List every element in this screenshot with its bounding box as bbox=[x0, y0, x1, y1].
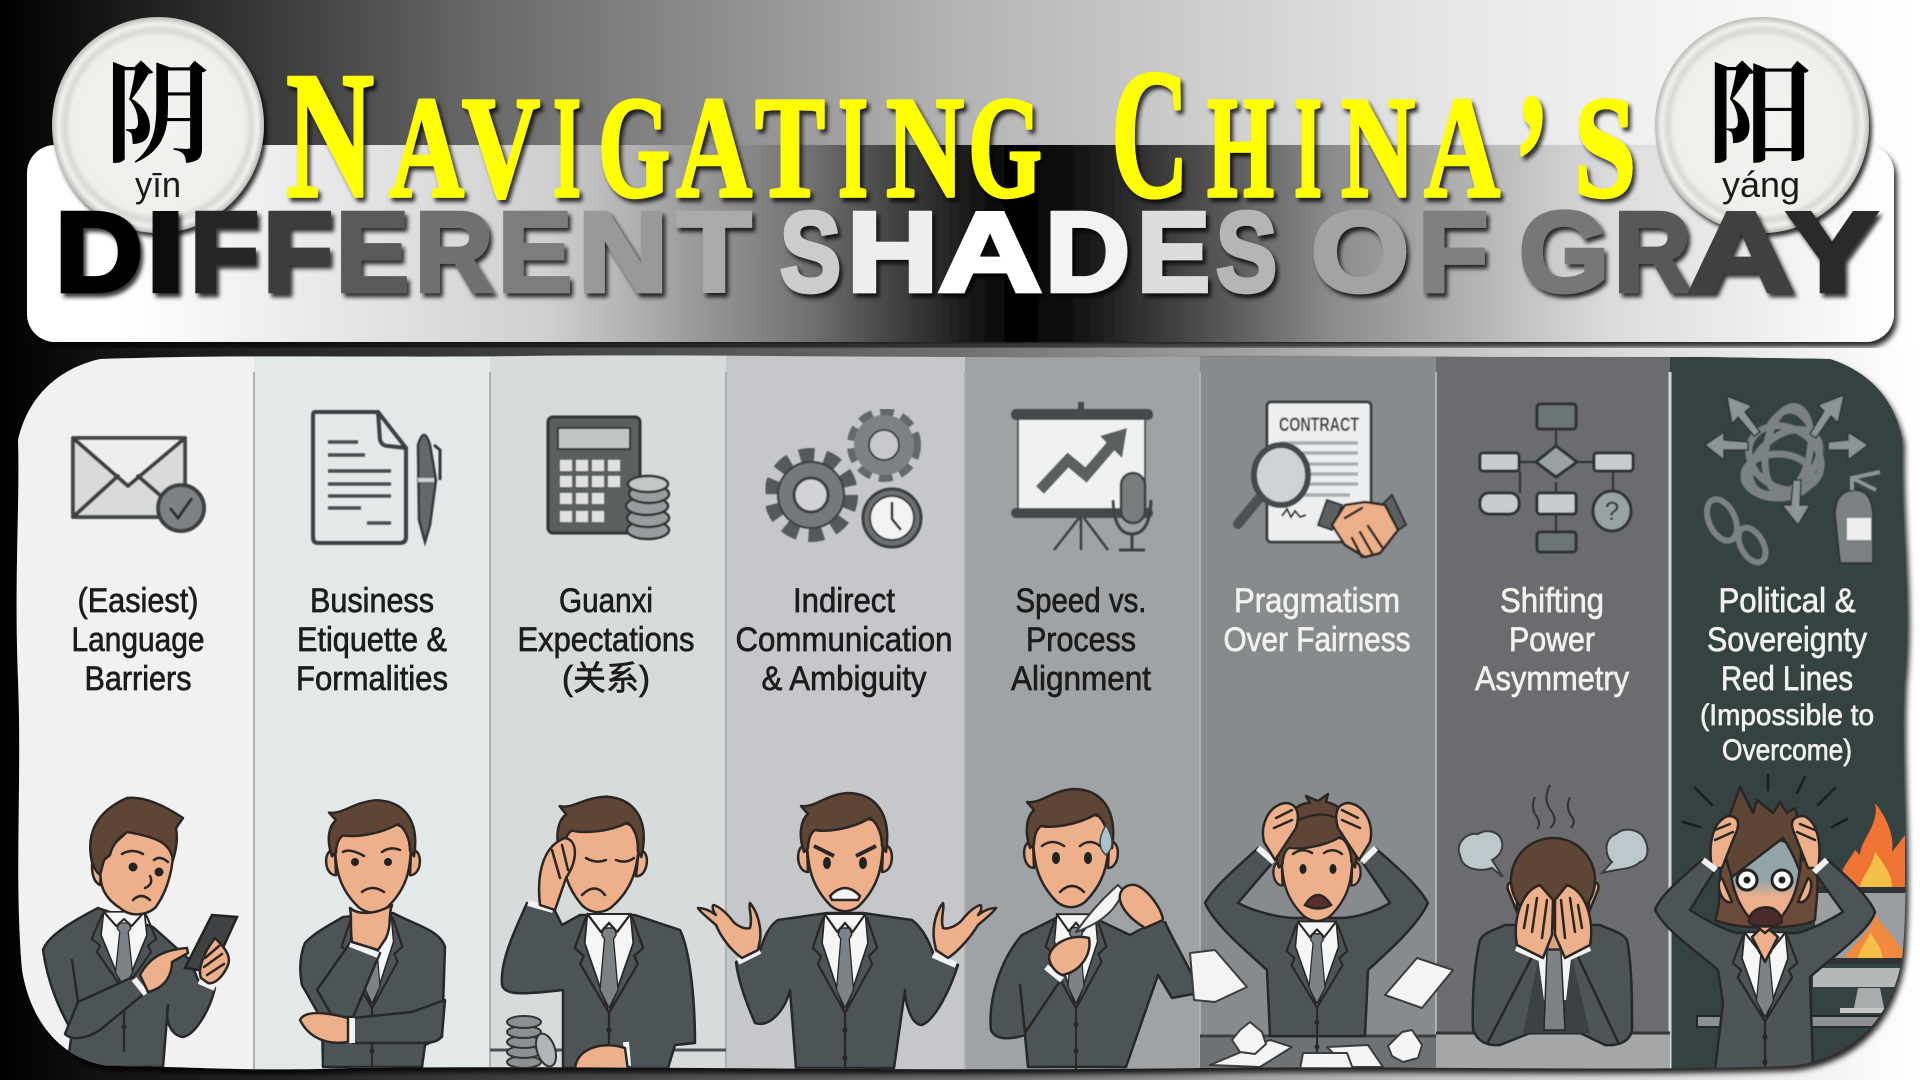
title: Navigating China's: S bbox=[1574, 68, 1636, 228]
subtitle: Different Shades of Gray: F bbox=[263, 189, 333, 315]
subtitle: Different Shades of Gray: A bbox=[938, 189, 1042, 315]
label: speed vs process bbox=[1011, 582, 1152, 698]
icon: calculator and coins bbox=[548, 417, 669, 539]
label: pragmatism over fairness: Over Fairness bbox=[1224, 621, 1410, 659]
subtitle: Different Shades of Gray: G bbox=[1519, 189, 1609, 315]
label: language barriers: Language bbox=[72, 621, 204, 659]
label: speed vs process: Speed vs. bbox=[1016, 582, 1146, 620]
figure: man checking phone bbox=[43, 798, 237, 1067]
subtitle: Different Shades of Gray: D bbox=[55, 189, 143, 315]
title: Navigating China's: A bbox=[389, 68, 464, 228]
title: Navigating China's: A bbox=[676, 68, 752, 228]
column 8: political and sovereignty red lines bbox=[1655, 395, 1912, 1080]
label: shifting power asymmetry: Shifting bbox=[1500, 582, 1604, 620]
icon: tangled knot, broken chain, extinguisher bbox=[1701, 395, 1880, 567]
icon: presentation chart and microphone bbox=[1011, 402, 1153, 550]
figure: man thinking bbox=[300, 800, 445, 1080]
label: political and sovereignty red lines: (Impossible to bbox=[1700, 699, 1874, 732]
title: Navigating China's: ’ bbox=[1515, 56, 1549, 266]
label: guanxi expectations: Guanxi bbox=[559, 582, 653, 620]
panel shadow bbox=[17, 355, 1907, 1069]
label: pragmatism over fairness bbox=[1224, 586, 1410, 652]
icon: contract, magnifier and handshake bbox=[1238, 402, 1406, 557]
column 4: indirect communication bbox=[698, 416, 996, 1080]
icon: yang stone disc bbox=[1655, 17, 1869, 233]
title: Navigating China's: V bbox=[462, 68, 540, 228]
label: shifting power asymmetry bbox=[1475, 582, 1629, 698]
icon: gears and clock bbox=[773, 416, 921, 547]
title: Navigating China's: G bbox=[968, 68, 1042, 228]
subtitle: Different Shades of Gray: E bbox=[1137, 189, 1210, 315]
title: Navigating China's: G bbox=[598, 68, 670, 228]
icon: flowchart: ? bbox=[1605, 496, 1619, 526]
label: indirect communication: & Ambiguity bbox=[762, 660, 926, 698]
title: Navigating China's: N bbox=[286, 36, 374, 236]
subtitle: Different Shades of Gray: Y bbox=[1787, 189, 1877, 315]
icon: yin stone disc: 阴 bbox=[105, 27, 211, 185]
subtitle: Different Shades of Gray: R bbox=[415, 189, 493, 315]
subtitle: Different Shades of Gray: N bbox=[578, 189, 668, 315]
icon: yang stone disc: 阳 bbox=[1707, 27, 1813, 185]
figure: man with headache at table bbox=[490, 793, 726, 1080]
figure: man covering face, steam bbox=[1436, 785, 1670, 1073]
subtitle: Different Shades of Gray: E bbox=[336, 189, 409, 315]
panel: eight shades bbox=[0, 340, 1920, 1080]
icon: yang stone disc: yáng bbox=[1722, 164, 1800, 205]
subtitle: Different Shades of Gray: F bbox=[190, 189, 259, 315]
icon: envelope with check bbox=[73, 438, 204, 531]
subtitle: Different Shades of Gray: D bbox=[1045, 189, 1130, 315]
icon: yin stone disc bbox=[52, 17, 264, 233]
label: indirect communication: Communication bbox=[736, 621, 952, 659]
column 7: shifting power asymmetry bbox=[1436, 404, 1670, 1073]
label: guanxi expectations: (关系) bbox=[562, 660, 650, 698]
label: political and sovereignty red lines: Overcome) bbox=[1722, 734, 1852, 767]
title: Navigating China's: H bbox=[1207, 68, 1274, 228]
column 2: business etiquette bbox=[296, 412, 448, 1080]
icon: contract, magnifier and handshake: CONTRACT bbox=[1279, 415, 1359, 436]
title: Navigating China's: N bbox=[1341, 68, 1415, 228]
subtitle: Different Shades of Gray bbox=[55, 189, 1877, 315]
title: Navigating China's: I bbox=[838, 68, 868, 228]
column 5: speed vs process bbox=[991, 402, 1198, 1080]
column 6: pragmatism over fairness bbox=[1190, 402, 1453, 1076]
icon: flowchart bbox=[1480, 404, 1633, 552]
label: political and sovereignty red lines bbox=[1700, 582, 1874, 767]
title: Navigating China's: C bbox=[1111, 32, 1189, 237]
icon: yin stone disc: yīn bbox=[135, 164, 181, 205]
label: indirect communication: Indirect bbox=[793, 582, 896, 620]
title: Navigating China's: T bbox=[755, 68, 825, 228]
label: political and sovereignty red lines: Sovereignty bbox=[1707, 621, 1867, 659]
label: shifting power asymmetry: Power bbox=[1509, 621, 1595, 659]
label: pragmatism over fairness: Pragmatism bbox=[1234, 582, 1400, 620]
title: Navigating China's: N bbox=[886, 68, 964, 228]
label: business etiquette: Formalities bbox=[296, 660, 448, 698]
icon: document and pen bbox=[313, 412, 440, 543]
column 1: language barriers bbox=[43, 438, 237, 1067]
subtitle: Different Shades of Gray: T bbox=[677, 189, 751, 315]
title: Navigating China's: A bbox=[1424, 68, 1500, 228]
title: Navigating China's: I bbox=[553, 68, 581, 228]
label: business etiquette: Business bbox=[310, 582, 434, 620]
subtitle: Different Shades of Gray: I bbox=[146, 189, 185, 315]
label: language barriers: (Easiest) bbox=[78, 582, 198, 620]
label: speed vs process: Alignment bbox=[1011, 660, 1152, 698]
label: guanxi expectations bbox=[518, 582, 694, 698]
label: speed vs process: Process bbox=[1026, 621, 1136, 659]
subtitle: Different Shades of Gray: A bbox=[1688, 189, 1794, 315]
label: language barriers bbox=[74, 586, 204, 691]
label: guanxi expectations: Expectations bbox=[518, 621, 694, 659]
subtitle: Different Shades of Gray: H bbox=[847, 189, 938, 315]
label: business etiquette bbox=[298, 586, 448, 691]
subtitle: Different Shades of Gray: O bbox=[1311, 189, 1409, 315]
figure: man shrugging bbox=[698, 793, 996, 1080]
banner bar bbox=[27, 145, 1894, 342]
subtitle: Different Shades of Gray: E bbox=[498, 189, 572, 315]
label: shifting power asymmetry: Asymmetry bbox=[1475, 660, 1629, 698]
label: political and sovereignty red lines: Political & bbox=[1718, 582, 1856, 620]
figure: panicked gray-faced person, burning monitor bbox=[1655, 775, 1912, 1080]
label: language barriers: Barriers bbox=[84, 660, 192, 698]
label: business etiquette: Etiquette & bbox=[297, 621, 447, 659]
subtitle: Different Shades of Gray: F bbox=[1418, 189, 1488, 315]
column backgrounds bbox=[0, 340, 1920, 1080]
subtitle: Different Shades of Gray: R bbox=[1614, 189, 1691, 315]
label: political and sovereignty red lines: Red Lines bbox=[1721, 660, 1853, 698]
title: Navigating China's: I bbox=[1294, 68, 1322, 228]
column 3: guanxi expectations bbox=[490, 417, 726, 1080]
figure: man wiping sweat bbox=[991, 789, 1198, 1080]
label: indirect communication bbox=[736, 582, 952, 698]
figure: man panicking at desk bbox=[1190, 794, 1453, 1076]
subtitle: Different Shades of Gray: S bbox=[1216, 189, 1277, 315]
title: Navigating China's bbox=[286, 32, 1636, 266]
subtitle: Different Shades of Gray: S bbox=[780, 189, 841, 315]
